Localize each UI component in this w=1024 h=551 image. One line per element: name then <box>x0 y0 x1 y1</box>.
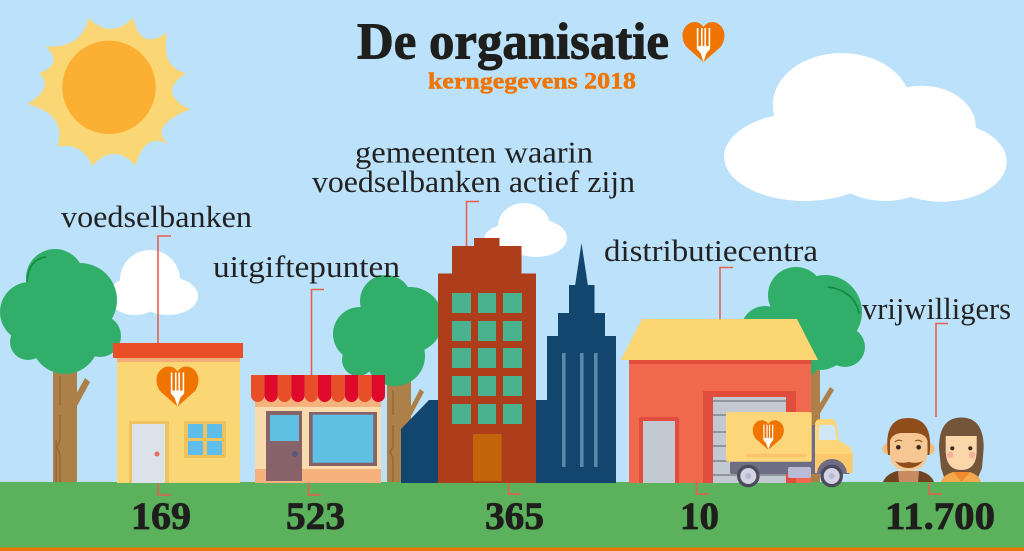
shop awning <box>251 375 385 402</box>
tree middle <box>333 275 443 483</box>
building: red office block <box>438 238 536 483</box>
icon: heart with fork on truck <box>753 420 784 450</box>
icon: title heart with fork <box>682 22 724 62</box>
label: gemeenten: gemeenten waarin <box>355 134 594 170</box>
large cloud <box>724 53 1007 202</box>
building: small food bank house <box>113 343 243 483</box>
volunteer: woman <box>939 418 984 482</box>
small cloud centre <box>484 203 567 257</box>
number: 365: 365 <box>485 495 544 538</box>
tree left <box>0 249 121 483</box>
delivery truck <box>726 412 853 487</box>
sun <box>27 18 190 166</box>
label: voedselbanken: voedselbanken <box>61 199 253 234</box>
orange bottom line <box>0 548 1024 551</box>
connector lines <box>158 202 948 495</box>
number: 11.700: 11.700 <box>885 495 995 538</box>
label: uitgiftepunten: uitgiftepunten <box>213 249 401 284</box>
building: shop <box>251 375 385 483</box>
label: gemeenten line 2: voedselbanken actief zijn <box>312 164 636 199</box>
tree right <box>741 267 865 483</box>
small cloud left <box>108 250 198 315</box>
volunteer: man <box>882 418 935 482</box>
subtitle: kerngegevens 2018 <box>428 68 636 94</box>
number: 169: 169 <box>131 495 191 538</box>
ground <box>0 482 1024 548</box>
label: vrijwilligers: vrijwilligers <box>862 291 1011 326</box>
number: 523: 523 <box>286 495 345 538</box>
building: distribution warehouse <box>621 319 818 483</box>
label: distributiecentra: distributiecentra <box>604 233 818 268</box>
icon: heart with fork on house <box>156 366 198 406</box>
title: De organisatie <box>357 14 669 70</box>
number: 10: 10 <box>680 495 719 538</box>
skyline: dark blue buildings <box>401 243 616 483</box>
